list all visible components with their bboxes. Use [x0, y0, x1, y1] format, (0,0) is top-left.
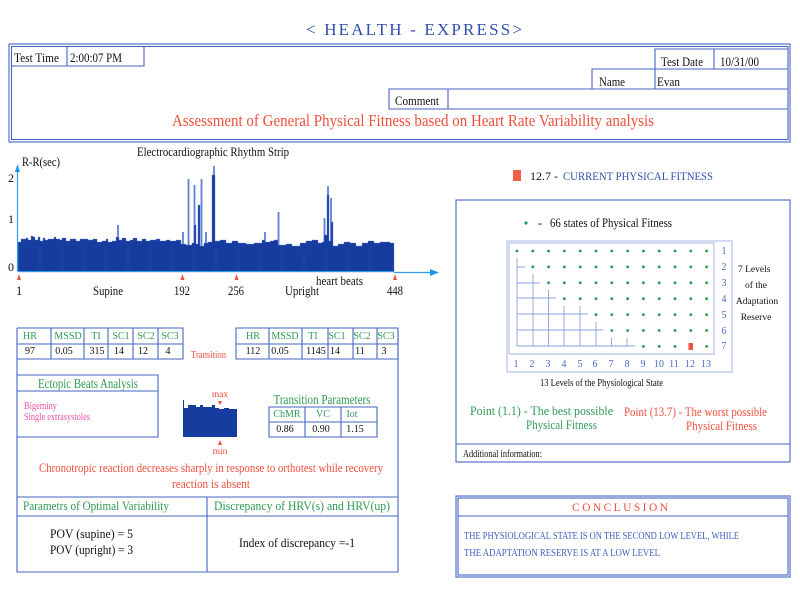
supine metrics table: 315 [90, 346, 104, 357]
column numbers: 11 [669, 359, 679, 370]
adaptation reserve label [736, 265, 778, 323]
test date field [655, 49, 788, 69]
x axis labels: Upright [285, 284, 319, 298]
supine metrics table: SC3 [161, 331, 179, 342]
row numbers: 2 [722, 262, 726, 273]
transition parameters: 0.86 [276, 424, 294, 435]
chronotropic finding: Chronotropic reaction decreases sharply in response to orthotest while recovery [39, 461, 384, 475]
matrix frame [507, 241, 732, 372]
name field: Evan [657, 75, 681, 89]
supine metrics table: HR [23, 331, 37, 342]
panel: rhythm strip chart [8, 145, 439, 298]
comment field [389, 89, 788, 109]
current fitness heading: CURRENT PHYSICAL FITNESS [563, 169, 713, 183]
optimal variability column: POV (upright) = 3 [50, 543, 133, 557]
supine metrics table [17, 328, 183, 359]
upright metrics table: SC3 [377, 331, 395, 342]
row numbers: 1 [722, 246, 726, 257]
test time field [11, 46, 144, 66]
row numbers [722, 246, 726, 352]
y axis ticks [8, 171, 14, 274]
supine metrics table: MSSD [54, 331, 82, 342]
transition parameters: VC [316, 409, 330, 420]
transition label: Transition [191, 350, 226, 361]
y axis ticks: 1 [8, 212, 14, 226]
panel: physical fitness matrix [456, 200, 790, 462]
x axis arrow [18, 269, 439, 276]
worst point note: Point (13.7) - The worst possible [624, 405, 767, 419]
x axis labels: 448 [387, 284, 403, 298]
best point note: Point (1.1) - The best possible [470, 404, 613, 418]
test time field: 2:00:07 PM [70, 51, 122, 65]
mini rhythm chart: min [213, 447, 228, 457]
matrix legend: 66 states of Physical Fitness [550, 216, 672, 230]
best point note: Physical Fitness [526, 418, 597, 432]
current fitness heading: 12.7 - [530, 169, 558, 183]
x axis labels: 1 [16, 284, 22, 298]
supine metrics table: 14 [114, 346, 124, 357]
panel: analysis [17, 328, 398, 572]
row numbers: 3 [722, 278, 726, 289]
title: < HEALTH - EXPRESS> [306, 20, 522, 39]
optimal variability column [23, 499, 170, 557]
heart beat bars [18, 175, 394, 272]
worst point note: Physical Fitness [686, 419, 757, 433]
column numbers: 9 [640, 359, 646, 370]
additional information: Additional information: [463, 449, 542, 460]
name field: Name [599, 75, 625, 89]
upright metrics table [236, 328, 398, 359]
ectopic beats box: Ectopic Beats Analysis [38, 376, 138, 391]
optimal variability column: Parametrs of Optimal Variability [23, 499, 170, 513]
conclusion text: THE ADAPTATION RESERVE IS AT A LOW LEVEL [464, 548, 660, 559]
excluded state lines [517, 258, 635, 346]
name field [592, 69, 788, 89]
discrepancy column [214, 499, 390, 550]
column numbers: 5 [578, 359, 582, 370]
x axis labels: 192 [174, 284, 190, 298]
transition parameters: 1.15 [346, 424, 364, 435]
row numbers: 5 [722, 310, 726, 321]
row numbers: 7 [722, 341, 726, 352]
upright metrics table: 0.05 [271, 346, 289, 357]
chart title: Electrocardiographic Rhythm Strip [137, 145, 289, 159]
ectopic beats box [17, 375, 158, 437]
upright metrics table: SC2 [353, 331, 371, 342]
light spikes [118, 166, 331, 255]
upright metrics table: HR [246, 331, 260, 342]
optimal variability column: POV (supine) = 5 [50, 527, 133, 541]
adaptation reserve label: Reserve [741, 313, 771, 323]
y axis ticks: 2 [8, 171, 14, 185]
supine metrics table: SC2 [137, 331, 155, 342]
x axis labels: Supine [93, 284, 123, 298]
column numbers: 1 [514, 359, 518, 370]
mini rhythm chart: max [212, 390, 228, 400]
transition parameters [269, 392, 377, 437]
test time field: Test Time [14, 51, 59, 65]
row numbers: 4 [722, 294, 726, 305]
transition parameters: Transition Parameters [274, 392, 370, 407]
beat markers [17, 274, 397, 280]
upright metrics table: 112 [246, 346, 260, 357]
column numbers: 4 [562, 359, 566, 370]
column numbers: 3 [546, 359, 550, 370]
transition parameters: ChMR [273, 409, 301, 420]
comment field: Comment [395, 94, 439, 108]
column numbers: 12 [685, 359, 695, 370]
chronotropic finding: reaction is absent [172, 477, 250, 491]
discrepancy column: Discrepancy of HRV(s) and HRV(up) [214, 499, 390, 513]
y axis arrow [15, 164, 20, 271]
upright metrics table: 14 [330, 346, 340, 357]
upright metrics table: 3 [382, 346, 386, 357]
current fitness heading [513, 169, 713, 183]
chronotropic finding [39, 461, 384, 491]
x axis labels: heart beats [316, 274, 363, 288]
report subtitle: Assessment of General Physical Fitness based on Heart Rate Variability analysis [172, 111, 654, 130]
column numbers: 7 [608, 359, 614, 370]
supine metrics table: 4 [166, 346, 170, 357]
test date field: Test Date [661, 55, 703, 69]
upright metrics table: TI [308, 331, 318, 342]
adaptation reserve label: of the [745, 280, 767, 291]
conclusion text: THE PHYSIOLOGICAL STATE IS ON THE SECOND LOW LEVEL, WHILE [464, 531, 739, 542]
supine metrics table: 12 [138, 346, 148, 357]
upright metrics table: MSSD [271, 331, 299, 342]
best point note [470, 404, 613, 432]
row numbers: 6 [722, 326, 726, 337]
adaptation reserve label: Adaptation [736, 297, 778, 307]
x axis labels [16, 274, 403, 298]
worst point note [624, 405, 767, 433]
y axis label: R-R(sec) [22, 155, 60, 169]
column numbers: 13 [701, 359, 711, 370]
x axis labels: 256 [228, 284, 244, 298]
conclusion heading: CONCLUSION [572, 502, 669, 514]
transition parameters: Iot [346, 409, 358, 420]
state dots [517, 251, 707, 346]
upright metrics table: 1145 [306, 346, 326, 357]
matrix legend: - [538, 216, 542, 230]
panel: test header [9, 44, 790, 142]
bar strip texture [40, 246, 370, 271]
column numbers: 10 [654, 359, 664, 370]
supine metrics table: 97 [25, 346, 35, 357]
physiological state label: 13 Levels of the Physiological State [540, 378, 663, 389]
column numbers [514, 359, 711, 370]
supine metrics table: 0.05 [55, 346, 73, 357]
test date field: 10/31/00 [720, 55, 759, 69]
column numbers: 8 [624, 359, 630, 370]
conclusion text [464, 531, 739, 559]
column numbers: 2 [530, 359, 534, 370]
ectopic beats box: Single extrasystoles [24, 412, 90, 423]
discrepancy column: Index of discrepancy =-1 [239, 536, 355, 550]
column numbers: 6 [592, 359, 598, 370]
ectopic beats box: Bigeminy [24, 401, 57, 412]
supine metrics table: TI [91, 331, 101, 342]
current state marker [688, 343, 693, 350]
y axis ticks: 0 [8, 260, 14, 274]
panel: conclusion [456, 496, 790, 577]
transition parameters: 0.90 [312, 424, 330, 435]
mini rhythm chart [183, 390, 237, 457]
upright metrics table: 11 [355, 346, 365, 357]
supine metrics table: SC1 [112, 331, 130, 342]
adaptation reserve label: 7 Levels [738, 265, 771, 275]
upright metrics table: SC1 [328, 331, 346, 342]
